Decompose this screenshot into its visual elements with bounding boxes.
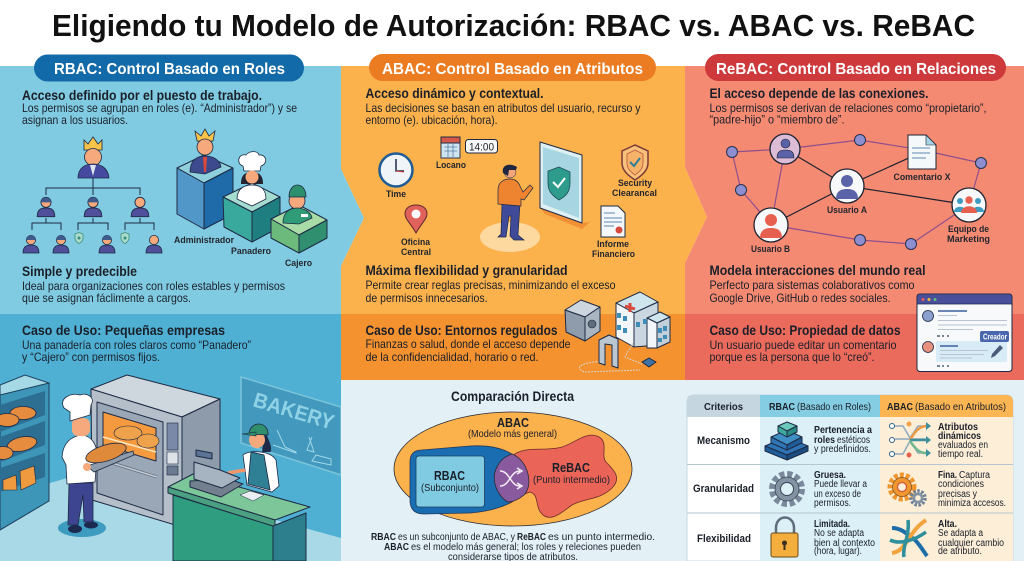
icon: security clearance bbox=[612, 145, 657, 198]
icon: location pin: Central bbox=[401, 247, 431, 257]
icon: location pin: Oficina bbox=[401, 237, 431, 247]
ABAC intro text: Acceso dinámico y contextual. bbox=[366, 85, 544, 101]
icon: flexible star bbox=[890, 520, 927, 557]
node: Usuario A bbox=[827, 169, 867, 215]
RBAC benefit text: que se asignan fáclimente a cargos. bbox=[22, 291, 191, 305]
row: Mecanismo: Atributos bbox=[938, 422, 978, 433]
icon: financial report: Financiero bbox=[592, 249, 635, 259]
comparison summary text: ABAC bbox=[384, 542, 409, 553]
node: marketing team: Marketing bbox=[947, 234, 990, 244]
ReBAC use case text bbox=[710, 322, 901, 364]
cube labels: Administrador bbox=[174, 235, 234, 245]
ReBAC header pill bbox=[705, 54, 1006, 81]
icon: attribute flows bbox=[890, 422, 931, 458]
row: Flexibilidad: bien al contexto bbox=[814, 538, 875, 549]
venn labels: ABAC bbox=[497, 415, 530, 430]
table header row: ABAC bbox=[887, 402, 913, 413]
oven bbox=[91, 375, 220, 527]
panel: ABAC bbox=[341, 54, 707, 380]
administrator cube bbox=[177, 129, 233, 229]
RBAC use case text: y “Cajero” con permisos fijos. bbox=[22, 350, 160, 364]
comparison summary text: es un subconjunto de ABAC, y bbox=[398, 532, 515, 543]
icon: security clearance: Security bbox=[618, 178, 652, 188]
ABAC use case text: de la confidencialidad, horario o red. bbox=[366, 350, 538, 364]
cube labels: Cajero bbox=[285, 258, 312, 268]
ReBAC benefit text bbox=[710, 262, 926, 305]
ABAC intro text: entorno (e). ubicación, hora). bbox=[366, 113, 498, 127]
ReBAC header pill: ReBAC: Control Basado en Relaciones bbox=[716, 61, 996, 78]
comparison summary text: ReBAC bbox=[517, 532, 546, 543]
node: Comentario X document bbox=[894, 135, 950, 182]
ABAC use case text: Caso de Uso: Entornos regulados bbox=[366, 322, 558, 338]
row: Granularidad: un exceso de bbox=[814, 489, 861, 500]
venn labels: (Modelo más general) bbox=[468, 429, 557, 440]
panel: direct comparison bbox=[341, 380, 1024, 561]
ABAC benefit text: Máxima flexibilidad y granularidad bbox=[366, 262, 568, 278]
node: Comentario X document: Comentario X bbox=[894, 172, 950, 182]
row: Flexibilidad bbox=[697, 518, 1004, 557]
RBAC benefit text: Ideal para organizaciones con roles estables y permisos bbox=[22, 279, 285, 293]
row: Flexibilidad: Alta. bbox=[938, 519, 957, 530]
row: Mecanismo: evaluados en bbox=[938, 440, 988, 451]
comparison heading: Comparación Directa bbox=[451, 388, 574, 404]
row: Mecanismo: tiempo real. bbox=[938, 449, 983, 460]
shelves with bread bbox=[0, 375, 49, 530]
row: Flexibilidad: Flexibilidad bbox=[697, 533, 751, 545]
ABAC header pill: ABAC: Control Basado en Atributos bbox=[382, 61, 643, 78]
icon: financial report: Informe bbox=[597, 239, 629, 249]
title: Eligiendo tu Modelo de Autorización: RBAC vs. ABAC vs. ReBAC bbox=[52, 8, 975, 43]
ReBAC intro text bbox=[710, 85, 986, 126]
row: Granularidad: permisos. bbox=[814, 498, 851, 509]
venn labels: (Punto intermedio) bbox=[533, 475, 610, 486]
node: marketing team bbox=[947, 188, 990, 244]
row: Granularidad: Puede llevar a bbox=[814, 479, 867, 490]
Creador tag: Creador bbox=[983, 332, 1008, 342]
row: Mecanismo: estéticos bbox=[837, 435, 870, 446]
node: Usuario A: Usuario A bbox=[827, 205, 867, 215]
row: Granularidad: Gruesa. bbox=[814, 470, 846, 481]
node: Usuario B: Usuario B bbox=[751, 244, 790, 254]
table header row: Criterios bbox=[704, 402, 743, 413]
icon: clock bbox=[380, 154, 412, 199]
comparison table bbox=[687, 395, 1013, 561]
row: Flexibilidad: cualquier cambio bbox=[938, 538, 1004, 549]
ReBAC intro text: El acceso depende de las conexiones. bbox=[710, 85, 928, 101]
cube labels bbox=[174, 235, 312, 268]
icon: calendar and time bbox=[436, 137, 498, 170]
bakery scene bbox=[0, 375, 341, 561]
table header row: (Basado en Roles) bbox=[797, 402, 871, 413]
bakery sign bbox=[241, 377, 341, 475]
row: Granularidad: Granularidad bbox=[693, 483, 754, 495]
row: Mecanismo: Pertenencia a bbox=[814, 425, 872, 436]
icon: location pin bbox=[401, 205, 431, 257]
panel: RBAC bbox=[0, 54, 364, 380]
shield screen bbox=[540, 142, 590, 229]
ReBAC benefit text: Google Drive, GitHub o redes sociales. bbox=[710, 291, 890, 305]
baker cube bbox=[223, 152, 280, 242]
node: user top bbox=[770, 134, 800, 164]
icon: calendar and time: Locano bbox=[436, 160, 466, 170]
cashier cube bbox=[271, 185, 327, 253]
RBAC intro text: asignan a los usuarios. bbox=[22, 113, 128, 127]
ABAC intro text bbox=[366, 85, 640, 127]
node: Usuario B bbox=[751, 208, 790, 254]
cube labels: Panadero bbox=[231, 246, 271, 256]
checkout counter bbox=[168, 450, 310, 561]
venn labels bbox=[421, 415, 610, 494]
row: Flexibilidad: Limitada. bbox=[814, 519, 850, 530]
ABAC benefit text: de permisos innecesarios. bbox=[366, 291, 488, 305]
row: Mecanismo: Mecanismo bbox=[697, 435, 750, 447]
icon: calendar and time: 14:00 bbox=[469, 142, 494, 154]
role cubes with people bbox=[174, 129, 327, 268]
ReBAC use case text: Un usuario puede editar un comentario bbox=[710, 338, 897, 352]
ABAC benefit text bbox=[366, 262, 616, 305]
ReBAC intro text: “padre-hijo” o “miembro de”. bbox=[710, 112, 844, 126]
row: Granularidad: condiciones bbox=[938, 479, 984, 490]
comparison summary text bbox=[371, 532, 655, 561]
row: Granularidad: minimiza accesos. bbox=[938, 498, 1006, 509]
ABAC header pill bbox=[369, 54, 656, 81]
RBAC intro text bbox=[22, 87, 297, 127]
venn labels: ReBAC bbox=[552, 460, 591, 475]
row: Mecanismo bbox=[697, 422, 988, 460]
person at access screen bbox=[480, 165, 540, 252]
row: Mecanismo: roles bbox=[814, 435, 835, 446]
RBAC intro text: Los permisos se agrupan en roles (e). “Administrador”) y se bbox=[22, 101, 297, 115]
row: Granularidad bbox=[693, 470, 1006, 509]
icon: safe bbox=[565, 300, 600, 341]
org chart hierarchy bbox=[23, 137, 162, 253]
icon: padlock bbox=[771, 518, 798, 557]
ABAC benefit text: Permite crear reglas precisas, minimizando el exceso bbox=[366, 278, 616, 292]
icon: orange gears bbox=[890, 475, 925, 505]
comparison summary text: es el modelo más general; los roles y releciones pueden bbox=[411, 542, 641, 553]
table header row bbox=[704, 402, 1006, 413]
ABAC intro text: Las decisiones se basan en atributos del usuario, recurso y bbox=[366, 101, 640, 115]
node: marketing team: Equipo de bbox=[948, 224, 989, 234]
row: Granularidad: precisas y bbox=[938, 489, 977, 500]
row: Granularidad: Fina. bbox=[938, 470, 957, 481]
bakery sign: BAKERY bbox=[251, 389, 337, 434]
comparison summary text: RBAC bbox=[371, 532, 396, 543]
row: Flexibilidad: (hora, lugar). bbox=[814, 546, 862, 557]
baker figure bbox=[58, 394, 134, 537]
icon: access gate and connections bbox=[579, 335, 656, 372]
table header row: (Basado en Atributos) bbox=[915, 402, 1006, 413]
ReBAC use case text: porque es la persona que lo “creó”. bbox=[710, 350, 874, 364]
RBAC benefit text bbox=[22, 263, 285, 305]
icon: hospital building bbox=[616, 292, 670, 348]
ReBAC benefit text: Modela interacciones del mundo real bbox=[710, 262, 926, 278]
venn diagram bbox=[394, 412, 632, 526]
icon: layer stack bbox=[765, 422, 808, 460]
ReBAC intro text: Los permisos se derivan de relaciones como “propietario”, bbox=[710, 101, 986, 115]
ReBAC use case text: Caso de Uso: Propiedad de datos bbox=[710, 322, 901, 338]
RBAC use case text: Una panadería con roles claros como “Panadero” bbox=[22, 338, 251, 352]
ABAC use case text bbox=[366, 322, 571, 364]
RBAC benefit text: Simple y predecible bbox=[22, 263, 137, 279]
icon: grey gear bbox=[772, 474, 802, 504]
venn labels: (Subconjunto) bbox=[421, 483, 479, 494]
RBAC use case text bbox=[22, 322, 251, 364]
ReBAC benefit text: Perfecto para sistemas colaborativos como bbox=[710, 278, 915, 292]
icon: shuffle arrows bbox=[500, 468, 522, 489]
row: Mecanismo: dinámicos bbox=[938, 431, 981, 442]
icon: clock: Time bbox=[386, 189, 406, 199]
row: Flexibilidad: de atributo. bbox=[938, 546, 982, 557]
row: Flexibilidad: Se adapta a bbox=[938, 528, 983, 539]
relationship network graph bbox=[726, 134, 990, 254]
comment window illustration bbox=[917, 294, 1012, 372]
RBAC header pill bbox=[34, 54, 304, 82]
RBAC use case text: Caso de Uso: Pequeñas empresas bbox=[22, 322, 225, 338]
comparison summary text: es un punto intermedio. bbox=[548, 532, 655, 543]
RBAC intro text: Acceso definido por el puesto de trabajo. bbox=[22, 87, 262, 103]
cashier figure bbox=[228, 424, 279, 492]
table header row: RBAC bbox=[769, 402, 795, 413]
icon: security clearance: Clearancal bbox=[612, 188, 657, 198]
row: Granularidad: Captura bbox=[959, 470, 990, 481]
icon: financial report bbox=[592, 206, 635, 259]
ABAC use case text: Finanzas o salud, donde el acceso depende bbox=[366, 337, 571, 351]
row: Flexibilidad: No se adapta bbox=[814, 528, 864, 539]
RBAC header pill: RBAC: Control Basado en Roles bbox=[54, 61, 285, 78]
row: Mecanismo: y predefinidos. bbox=[814, 444, 871, 455]
panel: ReBAC bbox=[685, 54, 1024, 380]
venn labels: RBAC bbox=[434, 468, 465, 483]
